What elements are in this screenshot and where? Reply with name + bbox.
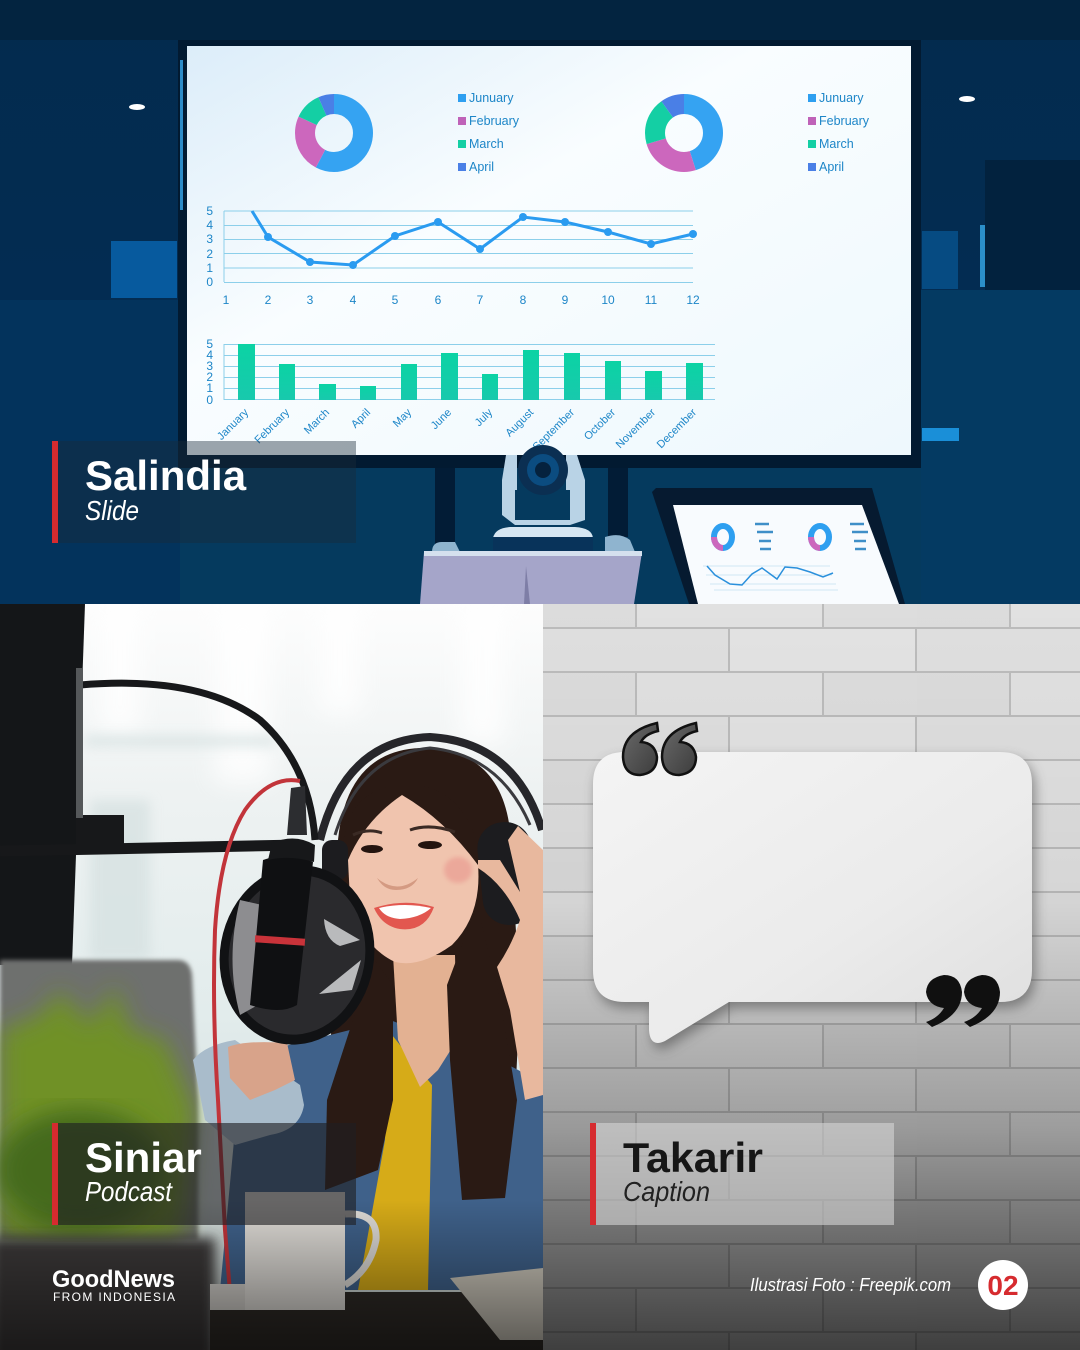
woman: sleeve xyxy=(193,1040,304,1145)
legend right: March xyxy=(819,137,854,151)
icon: opening quote xyxy=(623,723,697,775)
bar chart: August xyxy=(503,407,536,439)
woman: neck xyxy=(393,955,457,1087)
legend right: Junuary xyxy=(819,91,864,105)
bar chart: September xyxy=(531,406,577,453)
icon: red cable xyxy=(214,780,300,1330)
woman: hair back xyxy=(331,748,518,1070)
bar chart: November xyxy=(614,406,658,451)
line chart: 5 xyxy=(392,293,399,307)
line chart: 1 xyxy=(223,293,230,307)
legend right xyxy=(808,91,870,174)
panel: slide photo xyxy=(0,0,1080,604)
legend left xyxy=(458,91,520,174)
icon: speech bubble xyxy=(593,752,1035,1049)
bar chart: April xyxy=(349,407,373,431)
line chart: 11 xyxy=(645,293,658,307)
table xyxy=(210,1292,543,1350)
legend left: February xyxy=(469,114,520,128)
woman: eyebrows and eyes xyxy=(353,827,455,890)
line chart: 12 xyxy=(686,293,700,307)
line chart: 2 xyxy=(206,247,213,261)
bar chart: 2 xyxy=(206,370,213,384)
woman: hand xyxy=(478,826,543,1100)
caption label: Takarir: Caption xyxy=(623,1176,710,1207)
icon: pop filter xyxy=(220,866,374,1045)
caption label: Takarir xyxy=(590,1123,894,1225)
bar chart: January xyxy=(215,406,251,443)
line chart: 8 xyxy=(520,293,527,307)
caption label: Siniar xyxy=(52,1123,356,1225)
legend right: February xyxy=(819,114,870,128)
woman: jacket xyxy=(205,1020,543,1290)
legend left: Junuary xyxy=(469,91,514,105)
donut chart right xyxy=(655,104,713,162)
monitor frame xyxy=(178,40,921,468)
woman: yellow shirt xyxy=(358,1030,432,1290)
line chart xyxy=(206,204,700,307)
bar chart: July xyxy=(473,406,495,429)
line chart: 1 xyxy=(206,261,213,275)
page number badge: 02 xyxy=(987,1270,1019,1301)
caption label: Salindia: Salindia xyxy=(85,452,247,499)
logo: GoodNews from Indonesia: GoodNews xyxy=(52,1266,175,1293)
panel: caption wall photo xyxy=(543,604,1080,1350)
line chart: 9 xyxy=(562,293,569,307)
bar chart: 3 xyxy=(206,359,213,373)
legend left: March xyxy=(469,137,504,151)
line chart: 4 xyxy=(206,218,213,232)
plant xyxy=(0,985,195,1240)
caption label: Salindia xyxy=(52,441,356,543)
legend left: April xyxy=(469,160,494,174)
wall behind stand xyxy=(180,467,921,604)
icon: microphone xyxy=(250,786,315,1010)
line chart: 4 xyxy=(350,293,357,307)
bar chart: 0 xyxy=(206,393,213,407)
logo: GoodNews from Indonesia: FROM INDONESIA xyxy=(53,1290,175,1304)
panel: presentation screen xyxy=(187,46,911,455)
caption label: Siniar: Siniar xyxy=(85,1134,202,1181)
laptop xyxy=(0,960,198,1240)
line chart: 3 xyxy=(206,232,213,246)
woman: face xyxy=(348,795,478,963)
bar chart xyxy=(206,337,715,453)
line chart: 0 xyxy=(206,275,213,289)
bar chart: May xyxy=(391,406,414,430)
bar chart: October xyxy=(582,406,618,443)
legend right: April xyxy=(819,160,844,174)
bar chart: December xyxy=(655,406,699,451)
panel: podcast photo xyxy=(0,604,543,1350)
woman: hair strands xyxy=(447,962,517,1200)
line chart: 5 xyxy=(206,204,213,218)
woman: hairline xyxy=(340,785,488,900)
woman: arm left xyxy=(228,1042,295,1100)
panel: tablet xyxy=(652,488,905,604)
bar chart: June xyxy=(429,407,454,432)
bar chart: 4 xyxy=(206,348,213,362)
draped table xyxy=(420,535,642,604)
page number badge xyxy=(978,1260,1028,1310)
bar chart: March xyxy=(302,407,332,437)
bar chart: February xyxy=(253,406,292,446)
line chart: 6 xyxy=(435,293,442,307)
woman: smile xyxy=(374,903,434,929)
photo credit: Ilustrasi Foto : Freepik.com xyxy=(750,1275,951,1295)
caption label: Salindia: Slide xyxy=(85,495,139,526)
icon: conference camera xyxy=(493,445,593,537)
line chart: 3 xyxy=(307,293,314,307)
floor stands xyxy=(435,465,455,545)
black curtain xyxy=(0,604,85,965)
line chart: 10 xyxy=(601,293,615,307)
bar chart: 1 xyxy=(206,381,213,395)
line chart: 2 xyxy=(265,293,272,307)
bar chart: 5 xyxy=(206,337,213,351)
icon: closing quote xyxy=(926,975,1000,1027)
plant pot xyxy=(0,1238,215,1350)
icon: headphones xyxy=(320,737,542,928)
caption label: Siniar: Podcast xyxy=(85,1176,173,1207)
line chart: 7 xyxy=(477,293,484,307)
donut chart left xyxy=(305,104,363,162)
caption label: Takarir: Takarir xyxy=(623,1134,763,1181)
icon: microphone arm xyxy=(76,668,318,855)
mug xyxy=(210,1192,376,1310)
